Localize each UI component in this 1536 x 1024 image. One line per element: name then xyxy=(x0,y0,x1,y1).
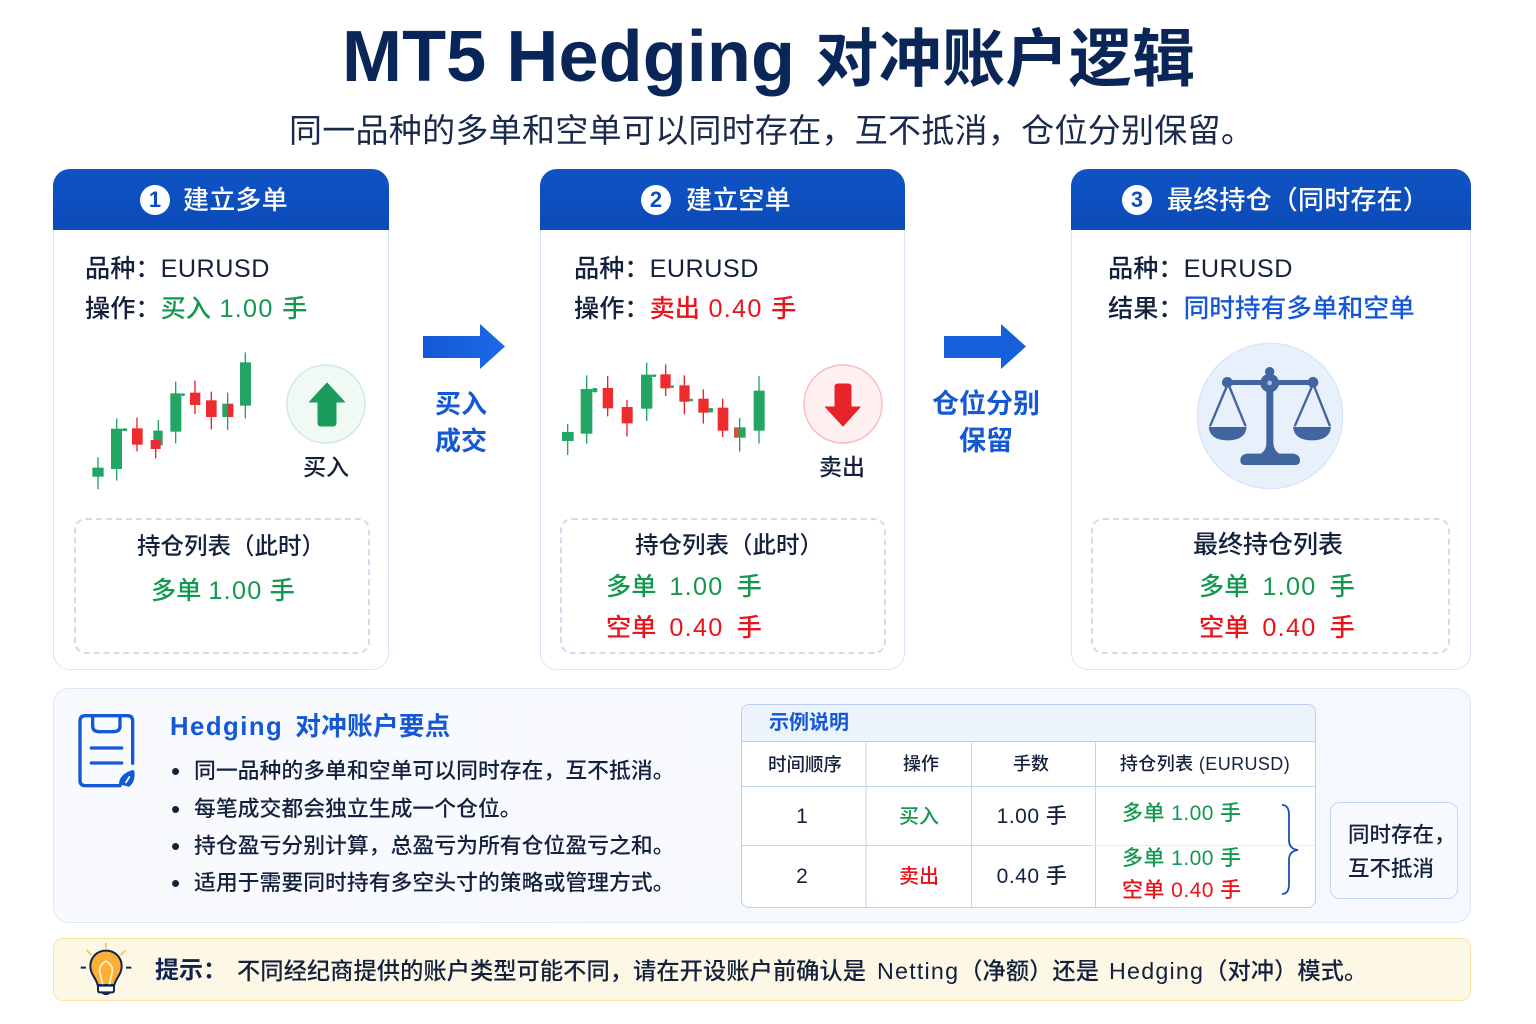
icon: light bulb xyxy=(80,943,132,996)
key points heading: Hedging 对冲账户要点 xyxy=(170,713,451,741)
point 1: • xyxy=(171,756,180,786)
row 1 order: 1 xyxy=(796,805,808,828)
step 3 list title: 最终持仓列表 xyxy=(1193,531,1343,559)
row 2 action: 卖出 xyxy=(899,866,939,888)
example table xyxy=(741,704,1316,908)
column header: lots: 手数 xyxy=(1013,754,1049,774)
row 2 short position: 空单 0.40 手 xyxy=(1122,879,1242,902)
arrow label: kept separately xyxy=(932,389,1040,456)
panel: step 3 final positions xyxy=(1071,169,1470,670)
row 2 lots: 0.40 手 xyxy=(997,865,1067,888)
column header: action: 操作 xyxy=(903,754,939,774)
step 2 action: 操作：卖出 0.40 手 xyxy=(574,295,796,323)
arrow label: buy filled: 买入 xyxy=(435,389,487,419)
step 1 long row: 多单 1.00 手 xyxy=(151,577,295,605)
brace xyxy=(1282,804,1298,895)
step 1 number xyxy=(140,185,170,215)
column header: order: 时间顺序 xyxy=(768,754,842,775)
step 2 number: 2 xyxy=(650,187,662,212)
table title bar xyxy=(742,705,1315,742)
callout: coexist without offset xyxy=(1330,802,1458,899)
icon: sell down arrow xyxy=(803,364,883,444)
row 2 long position: 多单 1.00 手 xyxy=(1122,847,1242,870)
tip text: 不同经纪商提供的账户类型可能不同，请在开设账户前确认是 Netting（净额）还是 Hedging（对冲）模式。 xyxy=(237,958,1367,984)
title: MT5 Hedging 对冲账户逻辑 xyxy=(342,17,1196,97)
arrow label: buy filled: 成交 xyxy=(435,426,487,456)
step 2 symbol: 品种：EURUSD xyxy=(574,255,759,283)
callout text xyxy=(1348,823,1456,881)
arrow label: kept separately: 保留 xyxy=(959,426,1013,456)
step 1 header xyxy=(53,169,389,230)
point 3: • xyxy=(171,831,180,861)
point 2: 每笔成交都会独立生成一个仓位。 xyxy=(194,796,522,821)
panel: hedging key points xyxy=(53,688,1471,923)
row 1 action: 买入 xyxy=(899,806,939,828)
step 3 number: 3 xyxy=(1131,187,1143,212)
row 1 positions: 多单 1.00 手 xyxy=(1122,802,1242,825)
callout text: 互不抵消 xyxy=(1348,857,1434,881)
step 2 header xyxy=(540,169,905,230)
table title: 示例说明 xyxy=(769,712,849,734)
step 1 symbol: 品种：EURUSD xyxy=(85,255,270,283)
point 1: 同一品种的多单和空单可以同时存在，互不抵消。 xyxy=(194,758,675,783)
step 1 action: 操作：买入 1.00 手 xyxy=(85,295,307,323)
step 3 heading: 最终持仓（同时存在） xyxy=(1167,185,1429,215)
step 1 position list xyxy=(74,518,370,654)
sell label: 卖出 xyxy=(819,454,865,480)
icon: clipboard note xyxy=(78,714,135,788)
tip label: 提示： xyxy=(155,957,227,984)
step 3 header xyxy=(1071,169,1470,230)
row 1 lots: 1.00 手 xyxy=(997,805,1067,828)
key points list xyxy=(171,756,675,898)
step 2 list title: 持仓列表（此时） xyxy=(635,532,823,558)
step 3 symbol: 品种：EURUSD xyxy=(1108,255,1293,283)
panel: step 2 open short xyxy=(540,169,905,670)
table grid lines xyxy=(742,742,1315,907)
step 3 result: 结果：同时持有多单和空单 xyxy=(1108,295,1415,323)
panel: tip bar xyxy=(53,938,1471,1001)
arrow label: buy filled xyxy=(435,389,487,456)
column header: positions: 持仓列表 (EURUSD) xyxy=(1120,754,1290,774)
step 2 long row: 多单 1.00 手 xyxy=(606,573,762,601)
buy label: 买入 xyxy=(303,454,349,480)
step 3 short row: 空单 0.40 手 xyxy=(1199,614,1355,642)
arrow label: kept separately: 仓位分别 xyxy=(932,389,1040,419)
callout text: 同时存在， xyxy=(1348,823,1456,847)
point 4: • xyxy=(171,868,180,898)
point 4: 适用于需要同时持有多空头寸的策略或管理方式。 xyxy=(194,870,675,895)
step 1 heading: 建立多单 xyxy=(183,185,288,215)
step 1 list title: 持仓列表（此时） xyxy=(137,533,325,559)
step 2 position list xyxy=(560,518,886,654)
icon: balance scale xyxy=(1196,342,1344,490)
chart: choppy candlesticks xyxy=(562,362,765,455)
subtitle: 同一品种的多单和空单可以同时存在，互不抵消，仓位分别保留。 xyxy=(289,112,1254,149)
step 3 position list xyxy=(1091,518,1450,654)
step 3 long row: 多单 1.00 手 xyxy=(1199,573,1355,601)
panel: step 1 open long xyxy=(53,169,389,670)
arrow: step 2 to 3 xyxy=(944,324,1026,369)
point 3: 持仓盈亏分别计算，总盈亏为所有仓位盈亏之和。 xyxy=(194,833,675,858)
point 2: • xyxy=(171,794,180,824)
chart: rising candlesticks xyxy=(92,352,251,490)
step 2 heading: 建立空单 xyxy=(686,185,791,215)
step 2 short row: 空单 0.40 手 xyxy=(606,614,762,642)
step 2 number xyxy=(641,185,671,215)
icon: buy up arrow xyxy=(286,364,366,444)
step 1 number: 1 xyxy=(149,187,161,212)
row 2 order: 2 xyxy=(796,865,808,888)
arrow: step 1 to 2 xyxy=(423,324,505,369)
step 3 number xyxy=(1122,185,1152,215)
